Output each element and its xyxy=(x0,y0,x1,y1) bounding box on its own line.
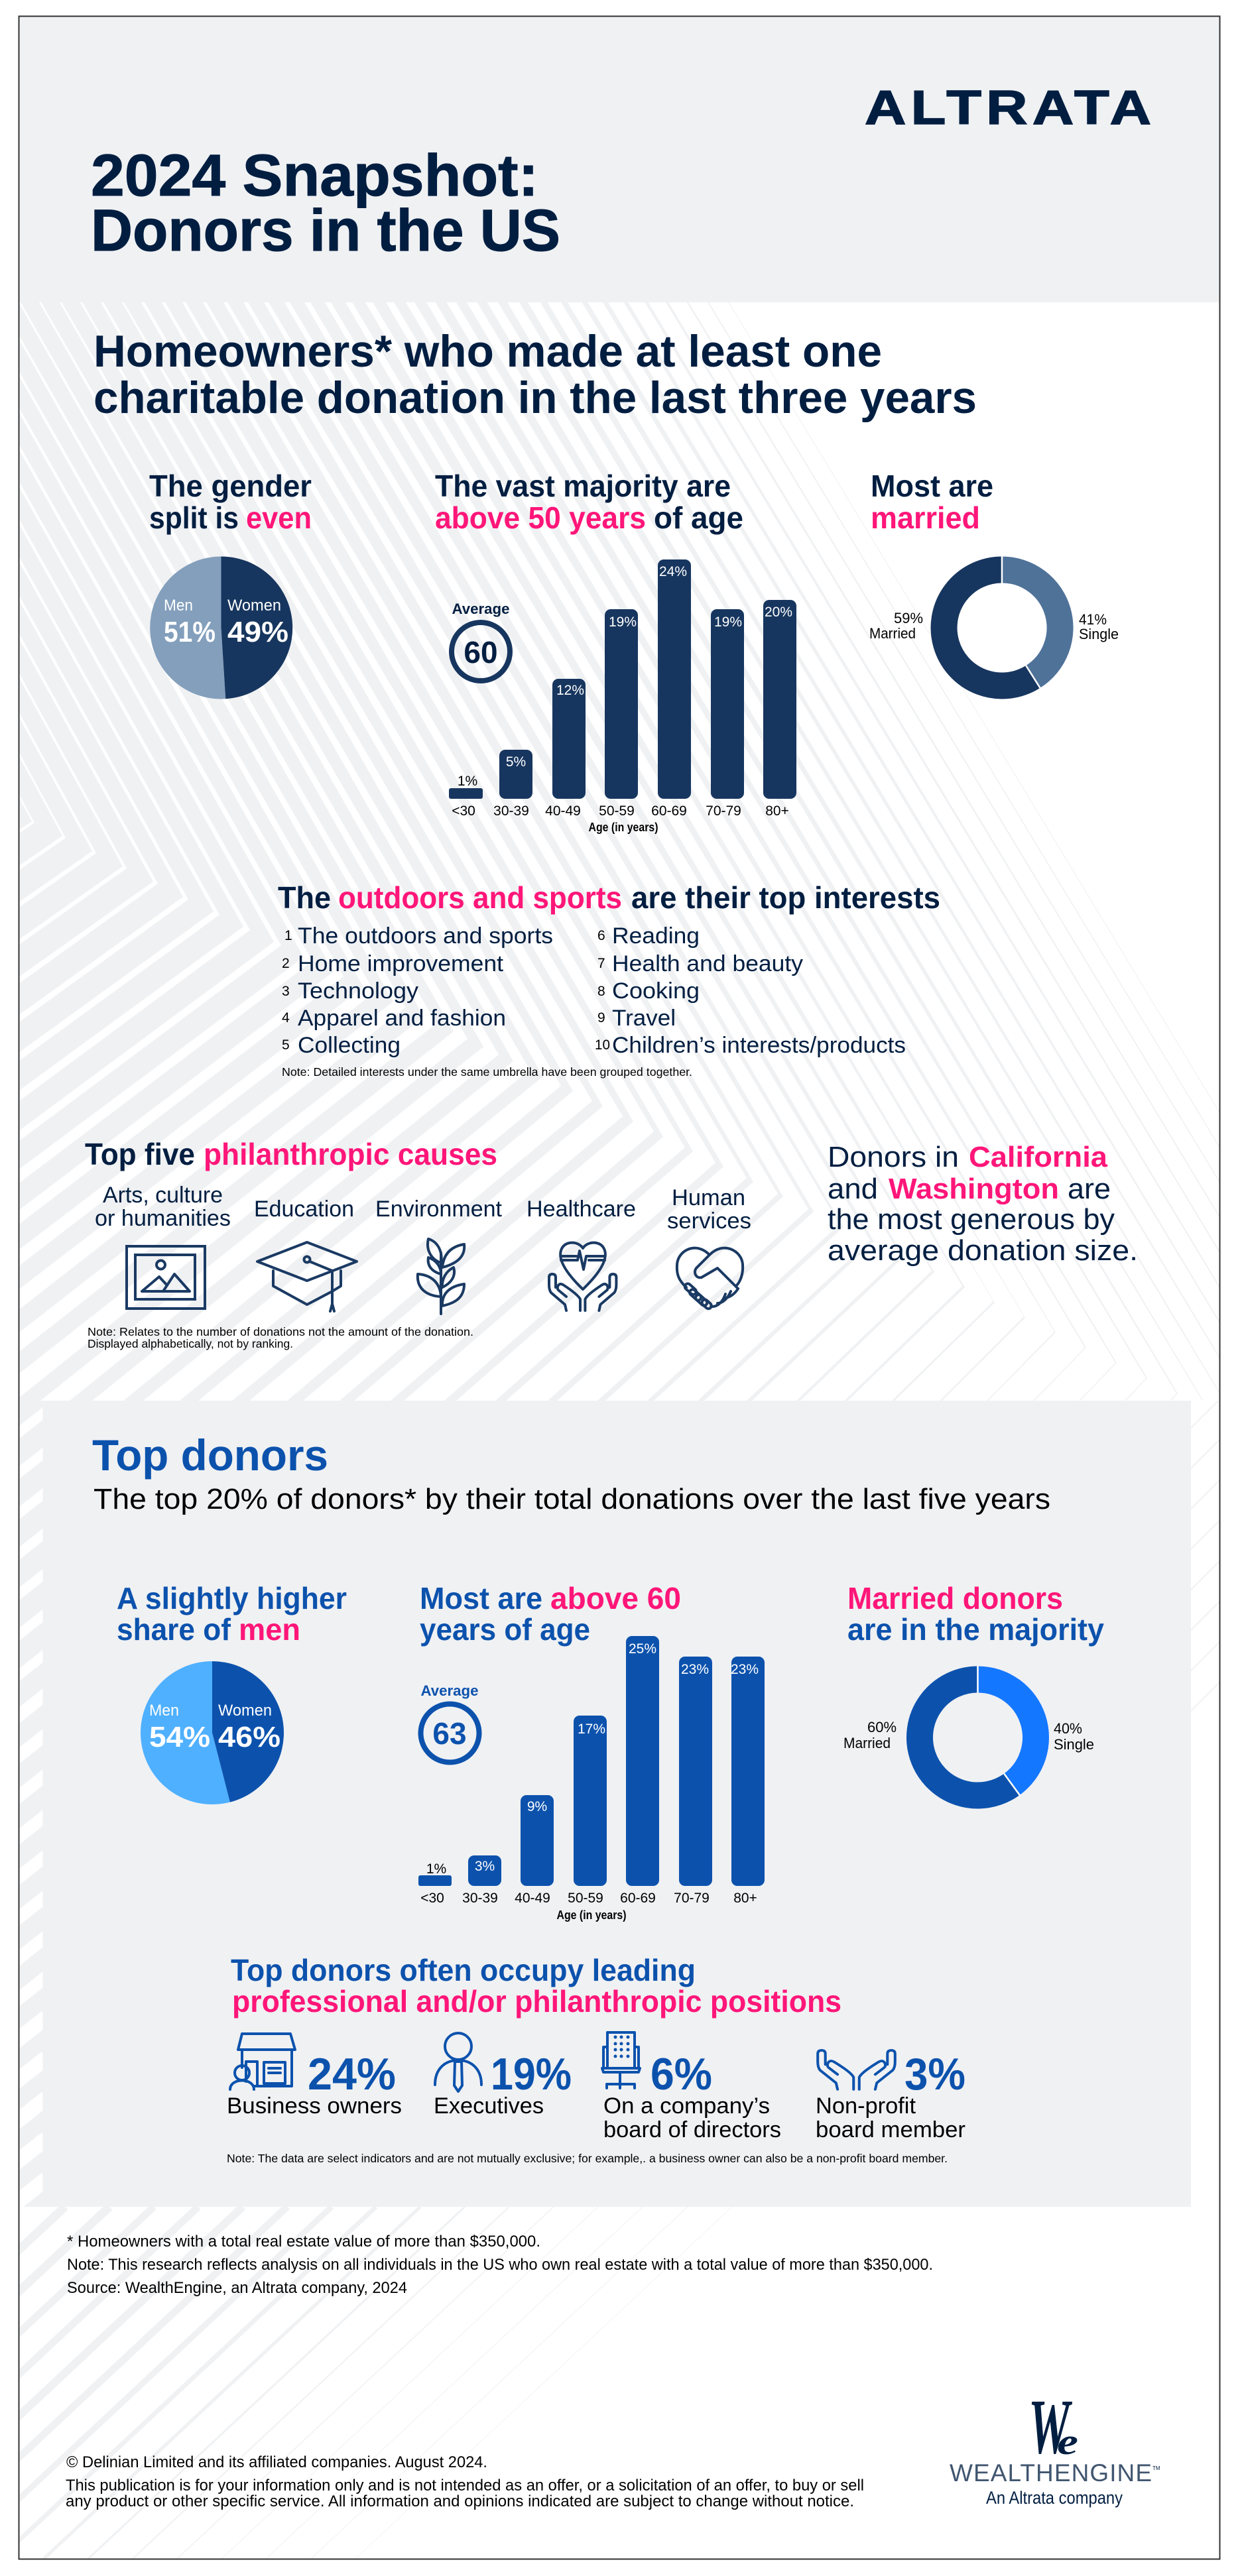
bar chart: top donors age: 30-39 xyxy=(462,1891,498,1906)
heading: gender split: even xyxy=(246,500,312,535)
logo: WealthEngine: e xyxy=(1057,2422,1078,2463)
panel: age distribution xyxy=(435,469,796,834)
list: interests ranking: 7 xyxy=(597,956,605,971)
panel: philanthropic causes xyxy=(85,1137,751,1350)
icon: graduation cap xyxy=(257,1242,357,1311)
callout: most generous states: Washington xyxy=(889,1173,1059,1205)
cause: education xyxy=(254,1197,357,1311)
list: interests ranking: Cooking xyxy=(612,978,700,1004)
cause: healthcare: Healthcare xyxy=(527,1197,636,1222)
callout: most generous states: are xyxy=(1068,1173,1111,1205)
stat: board of directors 6%: On a company’s xyxy=(603,2093,770,2119)
logo: WealthEngine: An Altrata company xyxy=(986,2488,1123,2508)
bar chart: age: 19% xyxy=(609,615,637,630)
heading: gender split: split is xyxy=(149,500,239,535)
bar chart: top donors age: <30 xyxy=(420,1891,444,1906)
list: interests ranking: 10 xyxy=(595,1037,610,1053)
callout: average age 63 xyxy=(420,1682,479,1762)
donut chart: marital status: 59% xyxy=(894,610,923,626)
logo: Altrata: ALTRATA xyxy=(865,81,1151,134)
bar chart: top donors age xyxy=(418,1636,765,1922)
list: interests ranking xyxy=(282,923,906,1058)
bar chart: age: 24% xyxy=(659,564,687,579)
bar chart: top donors age: 50-59 xyxy=(568,1891,603,1906)
stat: non-profit board member 3% xyxy=(816,2049,965,2142)
heading: homeowners section: Homeowners* who made at least one xyxy=(93,326,882,377)
donut chart: top donors marital status: Single xyxy=(1054,1736,1094,1753)
bar chart: age: 70-79 xyxy=(706,803,741,819)
heading: share of men xyxy=(117,1581,347,1647)
icon: open hands xyxy=(818,2050,895,2089)
cause: education: Education xyxy=(254,1197,354,1222)
note: causes: Note: Relates to the number of donations not the amount of the donation. xyxy=(88,1325,473,1338)
heading: interests: are their top interests xyxy=(631,880,940,915)
logo: WealthEngine: W xyxy=(1028,2383,1072,2470)
bar chart: age: 50-59 xyxy=(599,803,635,819)
heading: causes xyxy=(85,1137,497,1171)
callout: average age 60 xyxy=(452,601,510,681)
stat: non-profit board member 3%: board member xyxy=(816,2117,965,2142)
icon: leafy branch xyxy=(418,1239,464,1314)
list: interests ranking: 8 xyxy=(597,984,605,999)
heading: above 60 xyxy=(420,1581,681,1647)
cause: human services: services xyxy=(667,1208,751,1234)
footnotes: Note: This research reflects analysis on all individuals in the US who own real estate with a total value of more than $350,000. xyxy=(67,2256,933,2274)
cause: human services: Human xyxy=(672,1185,745,1210)
title: 2024 Snapshot: xyxy=(91,142,538,208)
bar chart: age: 80+ xyxy=(765,803,789,819)
legal text: any product or other specific service. All information and opinions indicated are subject to change without notice. xyxy=(66,2492,854,2510)
heading: leading positions: professional and/or philanthropic positions xyxy=(232,1984,841,2019)
icon: executive with tie xyxy=(435,2033,481,2091)
icon: heart in hands xyxy=(549,1243,616,1311)
heading: interests: outdoors and sports xyxy=(338,880,622,915)
bar chart: age: 30-39 xyxy=(493,803,529,819)
title: Donors in the US xyxy=(91,197,560,263)
list: interests ranking: 4 xyxy=(282,1010,290,1025)
heading: causes: philanthropic causes xyxy=(204,1137,497,1171)
heading: age: of age xyxy=(654,500,743,535)
heading: gender split xyxy=(149,469,312,535)
subheading: top donors: The top 20% of donors* by their total donations over the last five years xyxy=(93,1483,1050,1515)
logo: WealthEngine: TM xyxy=(1152,2465,1160,2471)
heading: marital status xyxy=(871,469,993,535)
bar chart: top donors age: 23% xyxy=(681,1662,709,1677)
pie chart: gender: Women xyxy=(227,597,281,615)
callout: average age 63: 63 xyxy=(432,1716,467,1751)
heading: causes: Top five xyxy=(85,1137,195,1171)
legal text xyxy=(66,2453,864,2510)
stat: board of directors 6%: 6% xyxy=(651,2049,712,2099)
heading: homeowners section xyxy=(93,326,977,423)
panel: top donors gender xyxy=(117,1581,347,1804)
bar chart: top donors age: 70-79 xyxy=(674,1891,710,1906)
stat: executives 19%: Executives xyxy=(434,2093,544,2119)
donut chart: top donors marital status: 60% xyxy=(867,1719,897,1735)
heading: above 60: above 60 xyxy=(550,1581,681,1615)
bar chart: top donors age: 23% xyxy=(731,1662,759,1677)
callout: most generous states: average donation size. xyxy=(828,1234,1138,1267)
logo: WealthEngine xyxy=(950,2383,1160,2508)
note: causes: Displayed alphabetically, not by ranking. xyxy=(88,1337,293,1350)
list: interests ranking: Children’s interests/products xyxy=(612,1033,906,1058)
callout: most generous states: and xyxy=(828,1173,878,1205)
heading: interests xyxy=(278,880,940,915)
icon: office chair xyxy=(602,2032,640,2088)
heading: leading positions: Top donors often occupy leading xyxy=(231,1953,696,1987)
stat: board of directors 6% xyxy=(602,2032,781,2142)
heading: share of men: A slightly higher xyxy=(117,1581,347,1615)
heading: marital status: married xyxy=(871,500,980,535)
bar chart: age: 40-49 xyxy=(545,803,581,819)
panel: top donors xyxy=(42,1401,1191,2207)
footnotes: Source: WealthEngine, an Altrata company, 2024 xyxy=(67,2279,407,2297)
heading: married donors xyxy=(847,1581,1104,1647)
callout: most generous states: the most generous by xyxy=(828,1203,1115,1236)
footnotes: * Homeowners with a total real estate value of more than $350,000. xyxy=(67,2233,540,2251)
heading: age xyxy=(435,469,743,535)
bar chart: top donors age: 80+ xyxy=(733,1891,757,1906)
stat: business owners 24% xyxy=(227,2034,402,2119)
panel: top interests xyxy=(278,880,940,1079)
cause: environment xyxy=(375,1197,503,1314)
note: positions: Note: The data are select indicators and are not mutually exclusive; for example,. a business owner can also be a non-profit board member. xyxy=(227,2152,948,2165)
bar chart: top donors age: Age (in years) xyxy=(557,1908,626,1922)
panel: marital status xyxy=(869,469,1119,688)
pie chart: top donors gender: Men xyxy=(149,1702,179,1720)
stat: executives 19%: 19% xyxy=(491,2049,572,2099)
cause: arts, culture or humanities: or humanities xyxy=(95,1206,231,1231)
donut chart: marital status: Married xyxy=(869,625,916,642)
bar chart: age: 19% xyxy=(714,615,742,630)
stat: non-profit board member 3%: 3% xyxy=(904,2049,965,2099)
heading: leading positions xyxy=(231,1953,841,2019)
bar chart: age: 20% xyxy=(765,605,792,620)
panel: gender split xyxy=(149,469,312,699)
heading: top donors: Top donors xyxy=(92,1431,328,1480)
heading: age: above 50 years xyxy=(435,500,646,535)
list: interests ranking: Reading xyxy=(612,923,700,949)
title xyxy=(91,142,560,263)
pie chart: top donors gender: 46% xyxy=(218,1721,280,1753)
heading: age: The vast majority are xyxy=(435,469,731,503)
list: interests ranking: Travel xyxy=(612,1006,676,1031)
stat: non-profit board member 3%: Non-profit xyxy=(816,2093,916,2119)
bar chart: top donors age: 1% xyxy=(426,1861,446,1877)
list: interests ranking: Collecting xyxy=(298,1033,401,1058)
bar chart: age: 12% xyxy=(556,683,584,698)
list: interests ranking: 2 xyxy=(282,956,290,971)
pie chart: top donors gender: 54% xyxy=(149,1721,210,1753)
list: interests ranking: Health and beauty xyxy=(612,951,804,976)
heading: above 60: years of age xyxy=(420,1612,590,1647)
list: interests ranking: 3 xyxy=(282,984,290,999)
legal text: This publication is for your information only and is not intended as an offer, or a solicitation of an offer, to buy or sell xyxy=(66,2477,864,2494)
callout: average age 60: Average xyxy=(452,601,509,617)
stat: business owners 24%: Business owners xyxy=(227,2093,402,2119)
pie chart: gender: 51% xyxy=(164,616,216,648)
icon: shop with person xyxy=(230,2034,295,2089)
cause: healthcare xyxy=(527,1197,636,1311)
donut chart: marital status: 41% xyxy=(1079,611,1107,628)
donut chart: top donors marital status: 40% xyxy=(1054,1720,1082,1737)
bar chart: top donors age: 17% xyxy=(578,1722,605,1737)
bar chart: top donors age: 9% xyxy=(527,1799,547,1814)
note: causes xyxy=(88,1325,473,1350)
pie chart: gender xyxy=(150,556,292,699)
list: interests ranking: 5 xyxy=(282,1037,290,1053)
donut chart: top donors marital status: Married xyxy=(843,1735,891,1751)
donut chart: top donors marital status xyxy=(843,1666,1094,1796)
heading: share of men: men xyxy=(239,1612,300,1647)
pie chart: top donors gender xyxy=(141,1661,284,1804)
bar chart: top donors age: 3% xyxy=(475,1859,495,1874)
logo: WealthEngine: WEALTHENGINE xyxy=(950,2459,1152,2487)
donut chart: marital status: Single xyxy=(1079,626,1119,642)
panel: header band xyxy=(19,16,1220,302)
footnotes xyxy=(67,2233,933,2297)
cause: environment: Environment xyxy=(375,1197,503,1222)
heading: gender split: The gender xyxy=(149,469,312,503)
list: interests ranking: Home improvement xyxy=(298,951,503,976)
bar chart: age: 60-69 xyxy=(651,803,687,819)
bar chart: top donors age: 60-69 xyxy=(620,1891,656,1906)
heading: homeowners section: charitable donation in the last three years xyxy=(93,373,977,423)
heading: married donors: Married donors xyxy=(847,1581,1063,1615)
panel: top donors age xyxy=(418,1581,765,1922)
bar chart: top donors age: 40-49 xyxy=(515,1891,550,1906)
pie chart: gender: 49% xyxy=(227,616,288,648)
list: interests ranking: 6 xyxy=(597,928,605,943)
cause: arts, culture or humanities: Arts, culture xyxy=(103,1183,223,1208)
pie chart: top donors gender: Women xyxy=(218,1702,272,1720)
donut chart: marital status xyxy=(869,556,1119,688)
callout: average age 60: 60 xyxy=(464,635,498,670)
callout: most generous states: California xyxy=(969,1141,1108,1173)
heading: share of men: share of xyxy=(117,1612,231,1647)
callout: average age 63: Average xyxy=(420,1682,479,1699)
heading: marital status: Most are xyxy=(871,469,993,503)
stat: business owners 24%: 24% xyxy=(308,2049,396,2099)
bar chart: age: Age (in years) xyxy=(589,821,658,834)
stat: executives 19% xyxy=(434,2033,572,2119)
cause: arts, culture or humanities xyxy=(95,1183,231,1309)
heading: married donors: are in the majority xyxy=(847,1612,1104,1647)
list: interests ranking: Apparel and fashion xyxy=(298,1006,506,1031)
bar chart: top donors age: 25% xyxy=(629,1641,656,1657)
panel: top donors marital status xyxy=(843,1581,1104,1796)
bar chart: age: 1% xyxy=(458,774,477,789)
callout: most generous states: Donors in xyxy=(828,1141,959,1173)
callout: most generous states xyxy=(828,1141,1138,1267)
list: interests ranking: 1 xyxy=(284,928,292,943)
stat: board of directors 6%: board of directors xyxy=(603,2117,781,2142)
heading: above 60: Most are xyxy=(420,1581,542,1615)
legal text: © Delinian Limited and its affiliated companies. August 2024. xyxy=(66,2453,487,2471)
cause: human services xyxy=(667,1185,751,1310)
heading: interests: The xyxy=(278,880,331,915)
bar chart: age: 5% xyxy=(506,754,526,770)
bar chart: age xyxy=(449,559,796,834)
list: interests ranking: The outdoors and sports xyxy=(298,923,553,949)
pie chart: gender: Men xyxy=(164,597,193,615)
icon: handshake heart xyxy=(677,1248,743,1310)
note: interests: Note: Detailed interests under the same umbrella have been grouped together. xyxy=(282,1065,692,1079)
bar chart: age: <30 xyxy=(452,803,475,819)
list: interests ranking: Technology xyxy=(298,978,419,1004)
list: interests ranking: 9 xyxy=(597,1010,605,1025)
icon: framed picture xyxy=(127,1246,205,1309)
